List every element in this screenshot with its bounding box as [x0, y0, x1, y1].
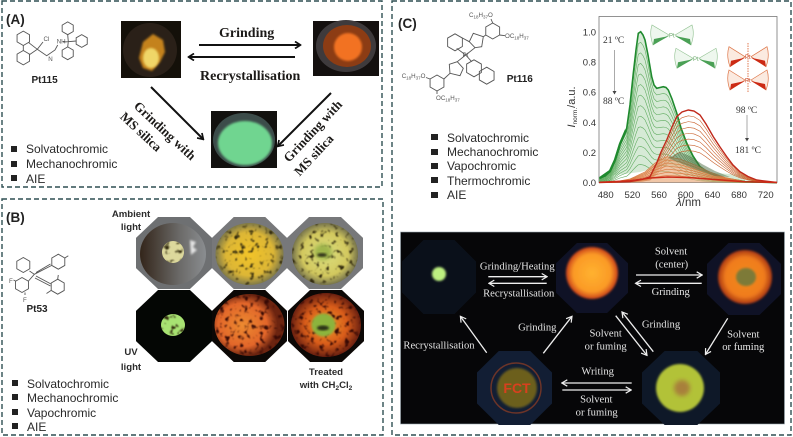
panel A: Pt115 — [2, 1, 382, 187]
photo: UV treated — [288, 290, 364, 362]
green spectra — [599, 32, 777, 183]
arrow labels: Recrystallisation — [403, 341, 475, 352]
arrow labels: Solvent — [727, 329, 760, 340]
molecule: Pt53 — [9, 254, 68, 315]
molecule: Pt116: OC — [505, 33, 514, 40]
y ticks: 0.0 — [583, 178, 596, 189]
y axis title: /a.u. — [566, 86, 578, 108]
inset: red stacked bowties: Pt — [745, 78, 751, 84]
y ticks: 1.0 — [583, 28, 596, 38]
label: grinding with MS silica, right: Grinding with — [280, 96, 346, 165]
photo: green solid with silica — [211, 111, 277, 168]
photo: orange ground — [556, 243, 628, 313]
photo: orange with solvent centre — [707, 243, 781, 315]
arrow labels: Recrystallisation — [483, 289, 555, 300]
x axis title: λ/nm — [675, 197, 701, 209]
arrow: left diagonal — [151, 87, 203, 139]
x ticks: 560 — [651, 190, 667, 201]
panel label B: (B) — [6, 210, 25, 225]
molecule: Pt116 — [402, 12, 533, 102]
molecule: Pt53: Pt53 — [26, 304, 48, 315]
caption: UV light: light — [121, 362, 142, 373]
x ticks — [598, 190, 774, 201]
red spectra — [599, 116, 777, 183]
molecule: Pt116: C — [402, 73, 406, 80]
inset: green bowtie 2: Pt — [693, 57, 699, 63]
outer green curve — [599, 32, 777, 183]
molecule: Pt115: Pt115 — [32, 75, 58, 86]
molecule: Pt116: 37 — [524, 36, 529, 40]
legend B: Mechanochromic — [27, 391, 118, 405]
photo: FCT writing — [477, 351, 552, 425]
legend C — [431, 131, 538, 202]
molecule: Pt116: H — [411, 73, 416, 80]
molecule: Pt116: Pt116 — [507, 74, 533, 85]
arrow labels — [403, 246, 765, 418]
heating labels red — [735, 106, 761, 156]
molecule: Pt116: Pt — [462, 52, 469, 59]
molecule: Pt116: H — [450, 95, 455, 102]
photo: ambient pristine — [136, 217, 212, 289]
y axis title: I — [566, 124, 578, 128]
cooling labels green: 88 ºC — [603, 97, 624, 107]
inset: green bowtie 2 — [675, 48, 717, 68]
legend A: Solvatochromic — [26, 142, 108, 156]
legend B: AIE — [27, 420, 46, 434]
x ticks: 480 — [598, 190, 614, 201]
molecule: Pt53: F — [23, 297, 27, 304]
caption: UV light — [121, 347, 142, 373]
heating labels red: 98 ºC — [736, 106, 757, 116]
molecule: Pt53: F — [9, 278, 13, 285]
molecule: Pt116: 18 — [514, 36, 520, 40]
caption: treated with CH2Cl2: Cl — [339, 380, 349, 391]
photo panel: stimuli cycle — [400, 232, 784, 425]
panel label C: (C) — [398, 16, 417, 31]
panel B: Pt53 — [2, 199, 383, 435]
arrow labels: Grinding — [642, 319, 681, 330]
red baseline band — [600, 177, 777, 182]
molecule: Pt116: H — [519, 33, 524, 40]
y ticks: 0.2 — [583, 148, 596, 159]
inset: green bowtie 1: Pt — [669, 34, 675, 40]
photo: UV ground — [212, 290, 287, 362]
x ticks: 720 — [758, 190, 774, 201]
molecule: Pt116: 37 — [416, 76, 421, 80]
legend C: Thermochromic — [447, 174, 530, 188]
molecule: Pt116: O — [488, 12, 493, 19]
legend B — [12, 377, 118, 434]
arrow labels: Solvent — [655, 246, 687, 257]
caption: ambient light: light — [121, 222, 142, 233]
white arrows — [461, 275, 728, 390]
caption: treated with CH2Cl2 — [299, 367, 353, 392]
molecule: Pt116: 18 — [406, 76, 412, 80]
arrow labels: Solvent — [580, 395, 613, 406]
inset: green bowtie 1 — [651, 25, 693, 45]
legend B: Vapochromic — [27, 406, 96, 420]
green left edge band — [600, 130, 626, 178]
panel C: Pt116 — [392, 1, 791, 435]
x ticks: 640 — [704, 190, 720, 201]
arrow labels: Grinding — [518, 322, 557, 333]
cooling labels green — [603, 36, 624, 107]
y ticks: 0.8 — [583, 58, 596, 68]
inset: red stacked bowties: Pt — [745, 55, 751, 61]
caption: treated with CH2Cl2: 2 — [335, 385, 339, 392]
panel label A: (A) — [6, 12, 25, 27]
caption: treated with CH2Cl2: with CH — [300, 380, 335, 391]
caption: ambient light: Ambient — [112, 209, 151, 220]
photo: yellow-green film — [642, 351, 720, 425]
photo: ambient treated — [287, 217, 363, 289]
x ticks: 520 — [624, 190, 640, 201]
arrow labels: Grinding/Heating — [480, 261, 555, 272]
label: grinding with MS silica, left: Grinding with — [131, 98, 200, 164]
y axis title: norm. — [572, 108, 579, 124]
arrow labels: or fuming — [585, 341, 627, 352]
legend C: Vapochromic — [447, 159, 516, 173]
molecule: Pt116: O — [421, 73, 426, 80]
chart: emission spectra — [566, 16, 777, 209]
arrow labels: (center) — [655, 259, 689, 270]
molecule: Pt116: 18 — [445, 98, 451, 102]
molecule: Pt115: N — [48, 56, 53, 63]
arrow labels: Grinding — [652, 287, 691, 298]
caption: ambient light — [112, 209, 151, 233]
outer red curve — [599, 110, 777, 182]
photo: yellow emissive solid — [121, 21, 181, 78]
y ticks: 0.4 — [583, 118, 596, 129]
molecule: Pt116: 18 — [473, 14, 479, 20]
caption: UV light: UV — [124, 347, 138, 358]
arrow labels: or fuming — [722, 342, 765, 353]
label: grinding with MS silica, left: MS silica — [117, 109, 165, 155]
legend A: Mechanochromic — [26, 157, 117, 171]
arrow: right diagonal — [278, 93, 331, 146]
arrow labels: Writing — [581, 367, 615, 378]
legend C: Mechanochromic — [447, 145, 538, 159]
caption: treated with CH2Cl2: 2 — [349, 385, 353, 392]
photo: FCT writing: FCT — [503, 380, 531, 396]
molecule: Pt116: OC — [436, 95, 445, 102]
x ticks: 600 — [678, 190, 694, 201]
molecule: Pt116: 37 — [455, 98, 460, 102]
x ticks: 680 — [731, 190, 747, 201]
arrow: recrystallisation — [189, 56, 295, 58]
molecule: Pt115: Cl — [44, 36, 49, 43]
legend C: Solvatochromic — [447, 131, 529, 145]
label: recrystallisation: Recrystallisation — [200, 69, 301, 84]
label: grinding with MS silica, right: MS silica — [291, 131, 337, 179]
arrow: grinding — [199, 44, 300, 46]
label: grinding: Grinding — [219, 26, 274, 41]
arrow labels: Solvent — [590, 329, 622, 340]
photo: UV pristine — [136, 290, 212, 362]
photo: ambient ground — [212, 217, 287, 289]
photo: orange ground solid — [313, 20, 379, 76]
inset: red stacked bowties — [728, 43, 768, 92]
legend C: AIE — [447, 188, 466, 202]
molecule: Pt115 — [17, 22, 87, 86]
arrow labels: or fuming — [576, 407, 618, 418]
orange low-intensity spectra — [612, 157, 745, 183]
y ticks: 0.6 — [583, 88, 596, 98]
legend A — [11, 142, 117, 186]
caption: treated with CH2Cl2: Treated — [309, 367, 343, 378]
heating labels red: 181 ºC — [735, 146, 761, 156]
legend B: Solvatochromic — [27, 377, 109, 391]
molecule: Pt116: C — [469, 12, 473, 19]
cooling labels green: 21 ºC — [603, 36, 624, 46]
molecule: Pt116: H — [478, 12, 483, 19]
molecule: Pt116: 37 — [483, 14, 488, 20]
legend A: AIE — [26, 172, 45, 186]
molecule: Pt115: NH — [57, 38, 66, 46]
y ticks — [583, 28, 596, 189]
photo: green crystals — [402, 240, 476, 314]
dark overlap band — [668, 152, 730, 177]
